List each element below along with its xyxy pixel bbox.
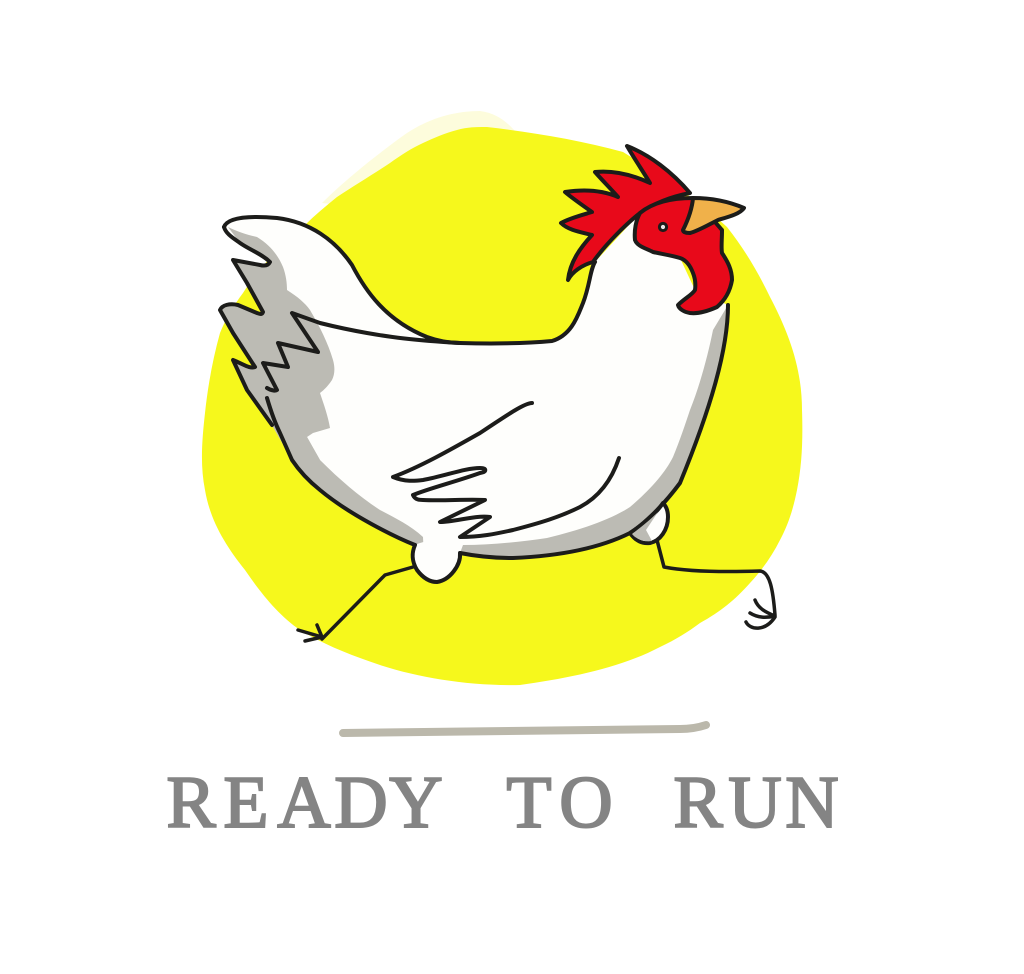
chicken body — [220, 213, 728, 558]
belly outline — [267, 398, 415, 545]
title: READYTORUN — [166, 762, 839, 844]
back thigh shadow — [632, 512, 658, 541]
back thigh — [630, 503, 668, 543]
comb — [561, 146, 690, 280]
front thigh — [413, 541, 460, 582]
tail top and back outline — [224, 217, 595, 343]
yellow circular blob background — [202, 127, 802, 685]
beak — [683, 198, 744, 233]
eye — [659, 223, 667, 231]
legs and feet — [298, 540, 775, 641]
front thigh outline — [413, 545, 460, 582]
lower-left body shadow — [272, 425, 424, 560]
inner tail zigzag — [263, 313, 460, 391]
body shadow — [460, 305, 728, 558]
head and wattle — [635, 198, 732, 313]
grey underline — [343, 725, 706, 733]
wing — [393, 403, 619, 537]
pale brushed edge of the blob — [322, 111, 515, 205]
tail feather outline — [220, 227, 272, 425]
breast and underside outline — [460, 305, 728, 558]
tail shadow — [220, 227, 334, 460]
chicken — [220, 146, 775, 641]
